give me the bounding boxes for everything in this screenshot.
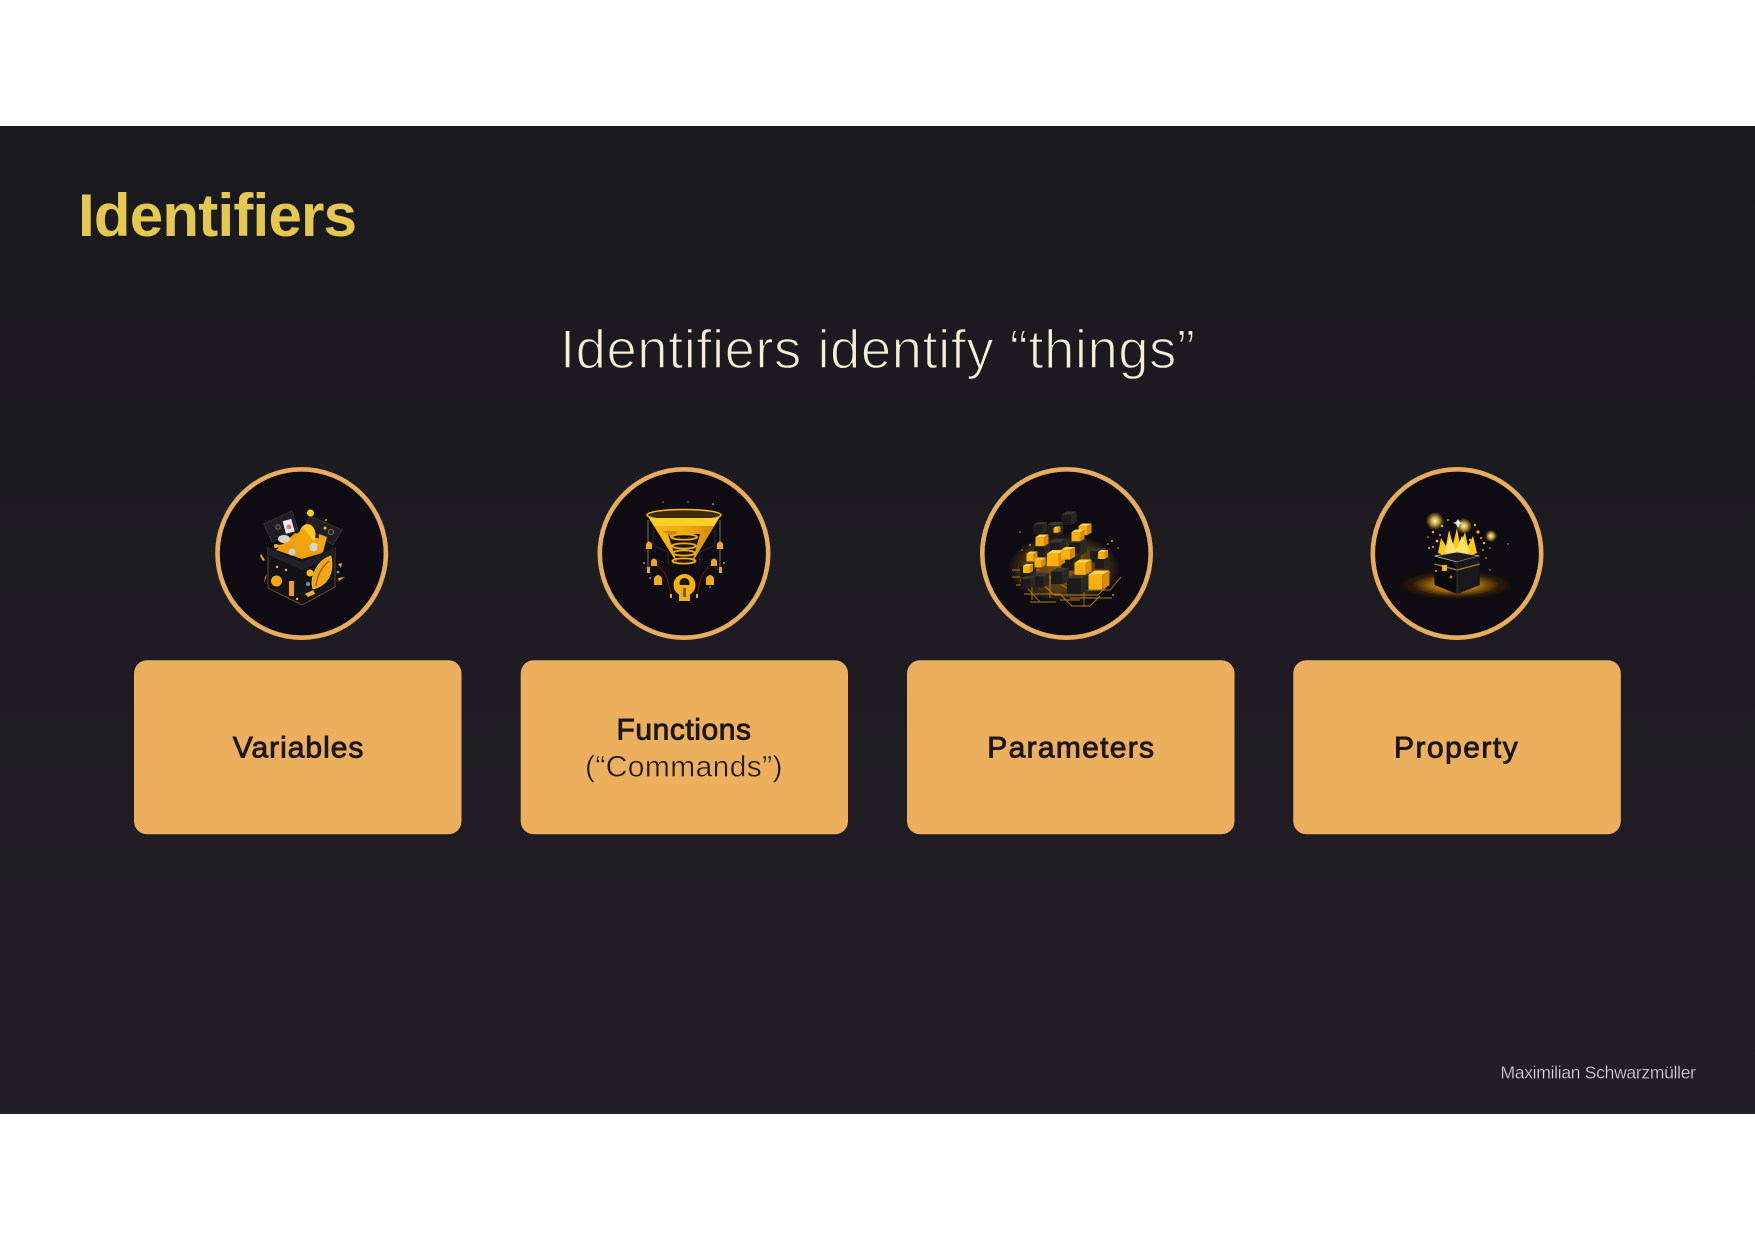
item: Parameters bbox=[907, 469, 1234, 834]
icon: isometric cubes bbox=[982, 469, 1151, 638]
icon: golden funnel bbox=[600, 469, 768, 638]
label card: Parameters: Parameters bbox=[987, 731, 1154, 764]
heading: Identifiers: Identifiers bbox=[78, 182, 357, 249]
icon: glowing box with sparks bbox=[1373, 469, 1541, 638]
label card: Functions (Commands): Functions bbox=[616, 713, 751, 746]
label card: Property bbox=[1293, 660, 1621, 834]
dark slide panel bbox=[0, 126, 1755, 1114]
item: Property bbox=[1293, 469, 1621, 834]
footer: author name: Maximilian Schwarzmüller bbox=[1500, 1062, 1696, 1082]
item: Variables bbox=[134, 469, 462, 834]
label card: Variables: Variables bbox=[233, 731, 363, 764]
label card: Functions (Commands) bbox=[521, 660, 848, 834]
icon: open treasure box bbox=[218, 469, 386, 638]
label card: Functions (Commands): (“Commands”) bbox=[585, 751, 782, 784]
label card: Variables bbox=[134, 660, 462, 834]
label card: Property: Property bbox=[1394, 731, 1518, 764]
item: Functions bbox=[521, 469, 848, 834]
label card: Parameters bbox=[907, 660, 1234, 834]
subtitle: Identifiers identify “things” bbox=[560, 319, 1195, 380]
